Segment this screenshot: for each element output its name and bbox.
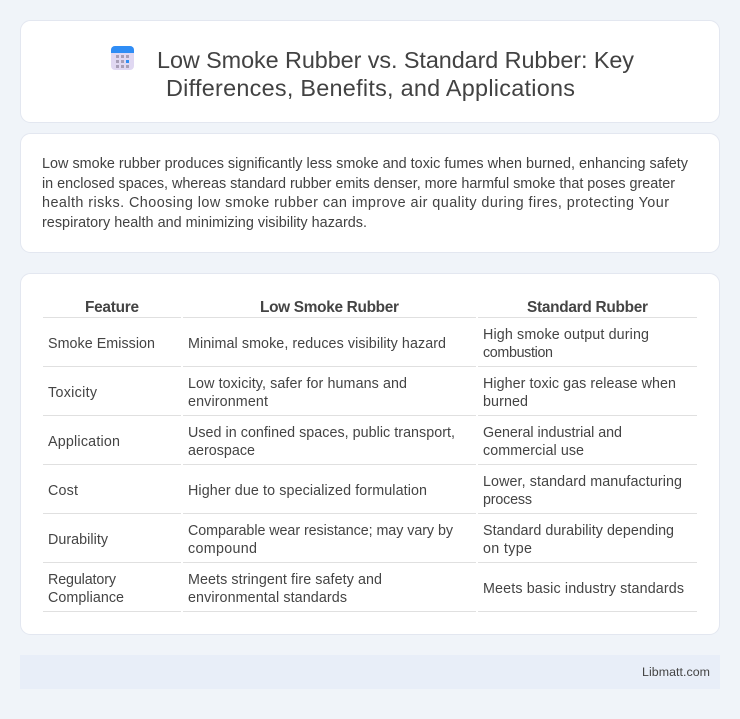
text block: summary (42, 156, 689, 231)
row: regulatory compliance: Regulatory (48, 572, 117, 588)
row: cost: Lower, standard manufacturing (483, 474, 682, 490)
text block: summary: health risks. Choosing low smoke rubber can improve air quality during fires, protecting Your (42, 195, 669, 211)
row: regulatory compliance: Meets stringent fire safety and (188, 572, 382, 588)
row: application: General industrial and (483, 425, 622, 441)
row: smoke emission (48, 327, 649, 361)
table header: Standard Rubber (527, 299, 648, 316)
row: regulatory compliance: Compliance (48, 590, 124, 606)
row: application (48, 425, 622, 459)
text block: summary: in enclosed spaces, whereas standard rubber emits denser, more harmful smoke that poses greater (42, 176, 675, 192)
row: smoke emission: High smoke output during (483, 327, 649, 343)
row: regulatory compliance: environmental standards (188, 590, 347, 606)
row: durability: Comparable wear resistance; may vary by (188, 523, 454, 539)
row: cost: Higher due to specialized formulation (188, 483, 427, 499)
row: regulatory compliance (48, 572, 684, 606)
title (157, 47, 634, 101)
row: application: Application (48, 434, 120, 450)
table header: Low Smoke Rubber (260, 299, 399, 316)
row: smoke emission: Minimal smoke, reduces visibility hazard (188, 336, 446, 352)
footer bar (20, 655, 720, 689)
row: durability: compound (188, 541, 257, 557)
row: smoke emission: Smoke Emission (48, 336, 155, 352)
row: toxicity (48, 376, 676, 410)
title: Differences, Benefits, and Applications (166, 75, 575, 101)
row: application: Used in confined spaces, public transport, (188, 425, 455, 441)
row: regulatory compliance: Meets basic industry standards (483, 581, 684, 597)
text block: summary: respiratory health and minimizing visibility hazards. (42, 215, 367, 231)
text block: summary: Low smoke rubber produces significantly less smoke and toxic fumes when burned, enhancing safety (42, 156, 689, 172)
row: application: commercial use (483, 443, 584, 459)
title: Low Smoke Rubber vs. Standard Rubber: Key (157, 47, 634, 73)
icon: calendar (111, 46, 134, 70)
row: cost (48, 474, 682, 508)
table header: Feature (85, 299, 139, 316)
row: durability: Standard durability depending (483, 523, 674, 539)
table header (85, 299, 648, 316)
panel: title card (20, 20, 720, 122)
row: toxicity: Higher toxic gas release when (483, 376, 676, 392)
row: durability (48, 523, 674, 557)
panel: introduction (20, 134, 720, 252)
row: cost: process (483, 492, 532, 508)
footer credit: Libmatt.com (642, 665, 710, 679)
row: toxicity: environment (188, 394, 268, 410)
row: durability: on type (483, 541, 532, 557)
panel: comparison table (20, 274, 720, 634)
row: toxicity: Toxicity (48, 385, 98, 401)
row: cost: Cost (48, 483, 78, 499)
row: toxicity: Low toxicity, safer for humans and (188, 376, 407, 392)
row: application: aerospace (188, 443, 255, 459)
row: durability: Durability (48, 532, 109, 548)
row: toxicity: burned (483, 394, 528, 410)
row: smoke emission: combustion (483, 345, 553, 361)
